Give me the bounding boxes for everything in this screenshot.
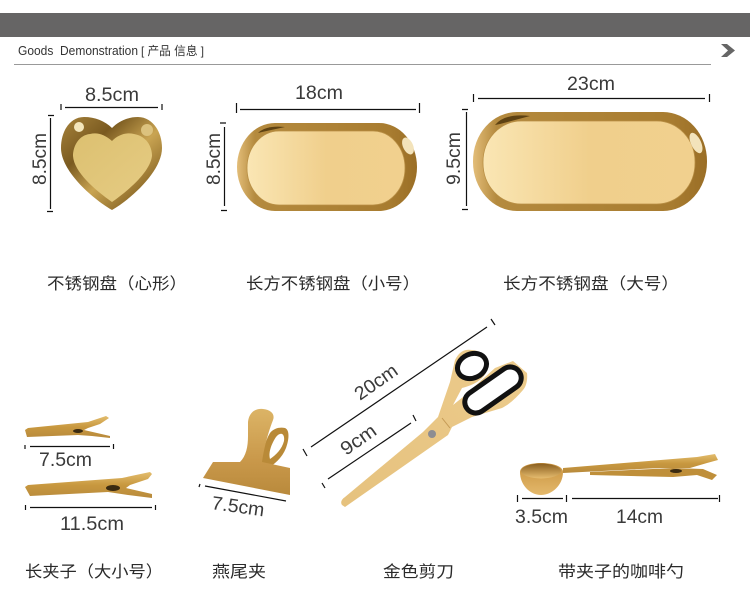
section title: Goods Demonstration bbox=[18, 43, 138, 58]
product: small long clip bbox=[25, 416, 114, 471]
header bar bbox=[0, 13, 750, 37]
product: large long clip bbox=[25, 472, 156, 535]
icon: chevron arrow bbox=[721, 44, 735, 57]
product: small long clip: 7.5cm bbox=[39, 450, 92, 471]
product: heart tray bbox=[30, 85, 162, 212]
label: long clips: 长夹子（大小号） bbox=[25, 563, 163, 581]
product: coffee spoon with clip: 14cm bbox=[616, 507, 663, 528]
product: bulldog clip bbox=[199, 409, 290, 521]
header divider bbox=[14, 64, 711, 65]
label: heart tray: 不锈钢盘（心形） bbox=[47, 274, 187, 293]
product: large long clip: 11.5cm bbox=[60, 514, 124, 535]
product: small oval tray bbox=[204, 83, 420, 211]
product: heart tray: 8.5cm bbox=[85, 85, 139, 106]
product: small oval tray: 8.5cm bbox=[204, 133, 225, 185]
label: scissors: 金色剪刀 bbox=[383, 563, 454, 581]
label: large tray: 长方不锈钢盘（大号） bbox=[503, 274, 679, 293]
label: coffee spoon: 带夹子的咖啡勺 bbox=[558, 563, 684, 581]
product: coffee spoon with clip: 3.5cm bbox=[515, 507, 568, 528]
label: bulldog clip: 燕尾夹 bbox=[212, 563, 266, 581]
product: scissors with dimensions: 20cm bbox=[351, 360, 402, 405]
product: large oval tray: 9.5cm bbox=[444, 132, 465, 185]
product: scissors with dimensions bbox=[303, 319, 527, 507]
product: small oval tray: 18cm bbox=[295, 83, 343, 104]
section title suffix: [ 产品 信息 ] bbox=[141, 43, 204, 58]
product: bulldog clip: 7.5cm bbox=[210, 493, 266, 521]
product: large oval tray: 23cm bbox=[567, 74, 615, 95]
label: small tray: 长方不锈钢盘（小号） bbox=[246, 274, 420, 293]
product: large oval tray bbox=[444, 74, 710, 211]
product: coffee spoon with clip bbox=[515, 454, 720, 528]
product: heart tray: 8.5cm bbox=[30, 133, 51, 185]
product: scissors with dimensions: 9cm bbox=[337, 421, 381, 460]
